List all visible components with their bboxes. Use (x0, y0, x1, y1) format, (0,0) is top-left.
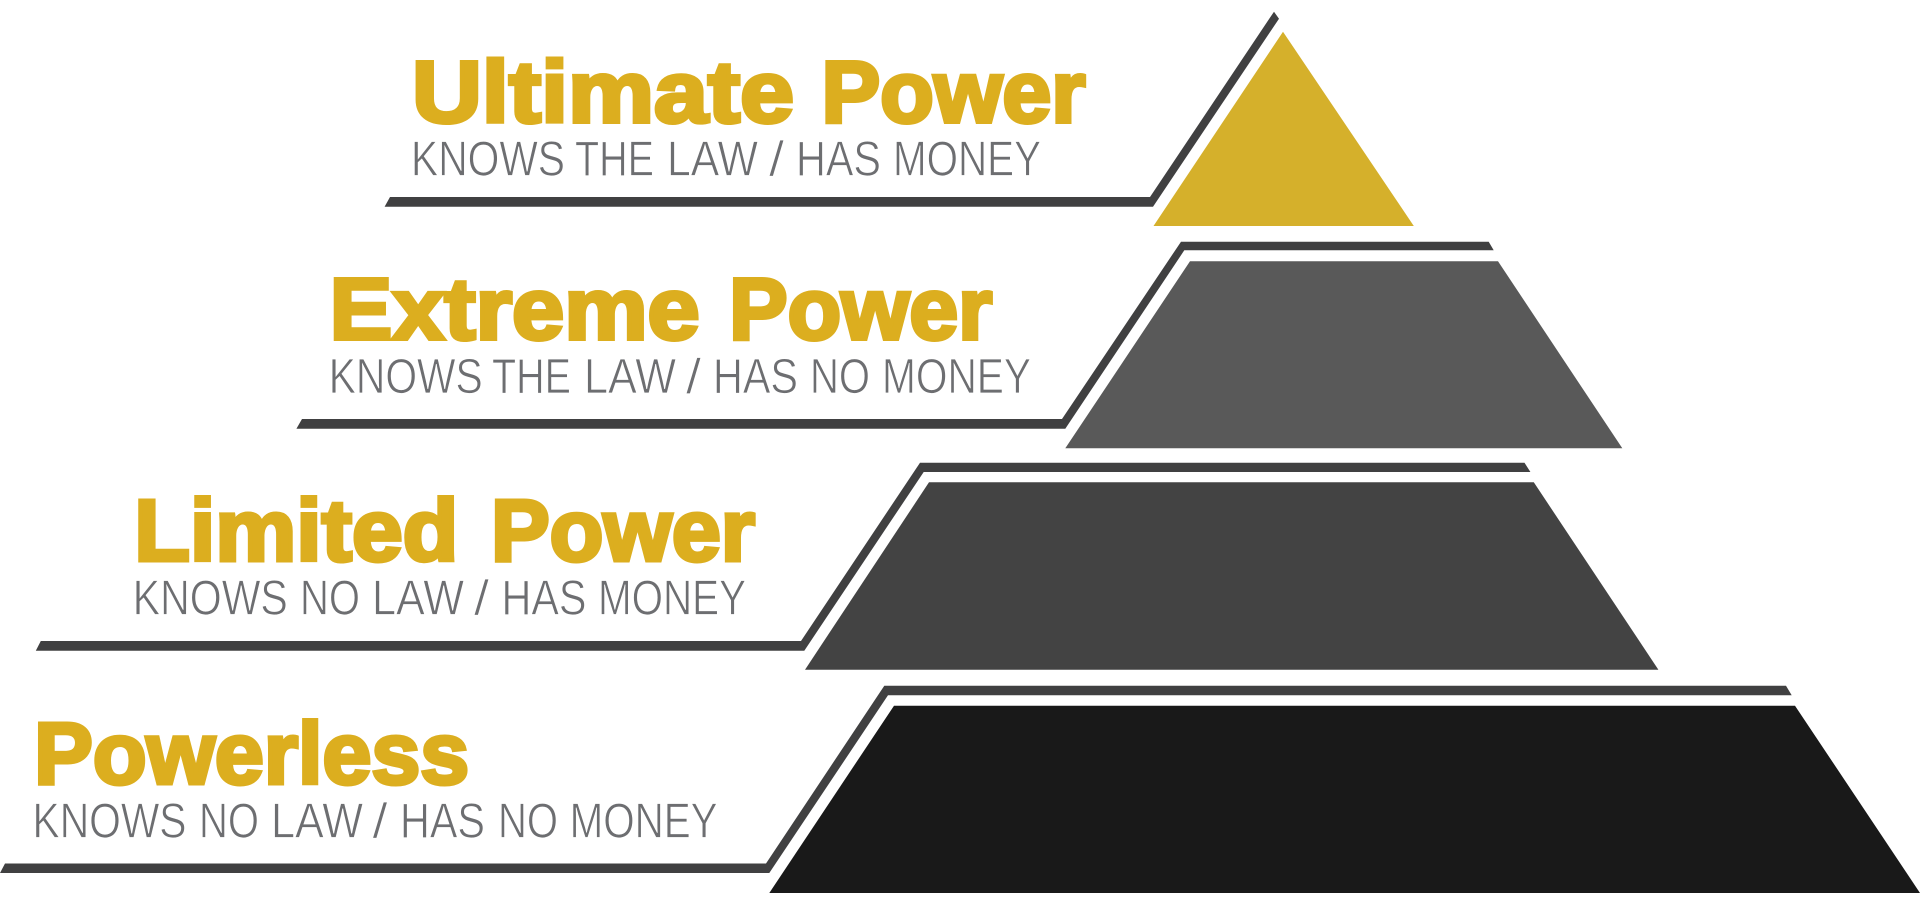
subtitle: knows the law, has no money (329, 350, 1031, 404)
heading: limited power: Limited (134, 483, 458, 580)
heading: extreme power: Extreme (330, 261, 700, 358)
subtitle: knows the law, has no money: KNOWS (329, 350, 483, 404)
heading: ultimate power (412, 44, 1086, 141)
subtitle: knows the law, has money: MONEY (893, 133, 1041, 187)
heading: ultimate power: Ultimate (412, 44, 794, 141)
bracket line: tier 4 (0, 686, 1792, 873)
bracket line: tier 2 (296, 242, 1494, 429)
heading: extreme power: Power (729, 261, 992, 358)
bracket line: tier 1 (385, 12, 1279, 207)
bracket line: tier 3 (36, 463, 1530, 651)
subtitle: knows no law, has money: KNOWS (133, 571, 288, 625)
heading: powerless: Powerless (34, 706, 469, 803)
subtitle: knows no law, has no money: MONEY (570, 794, 718, 848)
tier 1: ultimate power (385, 12, 1414, 226)
pyramid apex: gold triangle (1154, 32, 1414, 226)
subtitle: knows no law, has no money: KNOWS (32, 794, 186, 848)
subtitle: knows no law, has money: / (474, 571, 489, 625)
subtitle: knows no law, has no money: NO (199, 794, 259, 848)
tier 2: extreme power (296, 242, 1622, 448)
pyramid band: charcoal trapezoid (805, 482, 1658, 670)
subtitle: knows no law, has no money: LAW (271, 794, 364, 848)
subtitle: knows the law, has no money: NO (810, 350, 870, 404)
subtitle: knows the law, has money: HAS (796, 133, 881, 187)
subtitle: knows the law, has no money: MONEY (882, 350, 1031, 404)
heading: limited power (134, 483, 755, 580)
subtitle: knows the law, has no money: THE (492, 350, 571, 404)
subtitle: knows the law, has no money: HAS (713, 350, 798, 404)
subtitle: knows the law, has no money: / (686, 350, 701, 404)
heading: ultimate power: Power (822, 44, 1086, 141)
subtitle: knows no law, has no money (32, 794, 718, 848)
subtitle: knows the law, has money: KNOWS (411, 133, 565, 187)
heading: limited power: Power (491, 483, 755, 580)
subtitle: knows the law, has money: THE (575, 133, 654, 187)
tier 4: powerless (0, 686, 1920, 893)
subtitle: knows no law, has money: MONEY (598, 571, 746, 625)
subtitle: knows the law, has money: LAW (667, 133, 759, 187)
pyramid band: dark grey trapezoid (1065, 261, 1622, 448)
subtitle: knows no law, has no money: HAS (400, 794, 485, 848)
subtitle: knows the law, has money: / (769, 133, 784, 187)
subtitle: knows no law, has no money: / (372, 794, 388, 848)
pyramid base: near-black trapezoid (769, 706, 1920, 893)
subtitle: knows the law, has no money: LAW (584, 350, 677, 404)
subtitle: knows no law, has no money: NO (498, 794, 558, 848)
subtitle: knows no law, has money: HAS (502, 571, 586, 625)
heading: extreme power (330, 261, 992, 358)
subtitle: knows no law, has money: NO (300, 571, 360, 625)
subtitle: knows no law, has money (133, 571, 746, 625)
subtitle: knows the law, has money (411, 133, 1041, 187)
tier 3: limited power (36, 463, 1658, 670)
subtitle: knows no law, has money: LAW (372, 571, 465, 625)
